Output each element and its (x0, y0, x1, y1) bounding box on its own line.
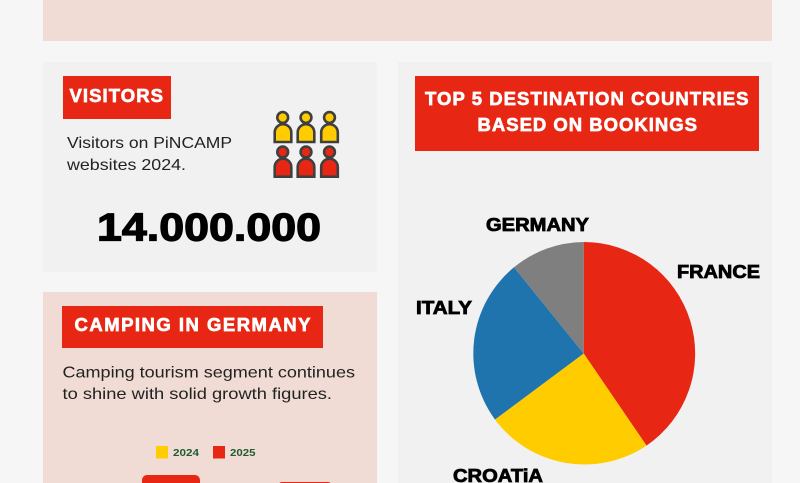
bar chart: tops of bars (142, 475, 332, 483)
panel: top 5 destination countries (398, 62, 772, 483)
heading: camping in Germany (62, 306, 323, 348)
heading: top 5 destination countries (415, 76, 759, 151)
icon: group of six people (275, 112, 338, 177)
text: camping description: Camping tourism segment continues (62, 364, 355, 382)
heading: top 5 destination countries: BASED ON BOOKINGS (478, 114, 697, 135)
heading: visitors (63, 76, 171, 119)
chart legend (156, 446, 256, 459)
pie chart (473, 242, 695, 464)
heading: top 5 destination countries: TOP 5 DESTINATION COUNTRIES (425, 88, 748, 109)
panel: camping in Germany (43, 292, 377, 483)
pie label: Italy: ITALY (416, 297, 473, 318)
top banner panel (43, 0, 772, 41)
big number: visitors count: 14.000.000 (97, 206, 321, 250)
text: visitors description (66, 135, 232, 174)
heading: visitors: VISITORS (70, 85, 163, 106)
heading: camping in Germany: CAMPING IN GERMANY (74, 314, 311, 335)
text: visitors description: Visitors on PiNCAMP (67, 135, 232, 152)
text: camping description: to shine with solid growth figures. (62, 386, 332, 403)
panel: visitors (43, 62, 377, 272)
pie label: France: FRANCE (677, 261, 760, 282)
pie label: Germany: GERMANY (486, 214, 590, 235)
chart legend: 2024 (173, 447, 199, 459)
text: visitors description: websites 2024. (66, 157, 186, 174)
chart legend: 2025 (230, 447, 256, 459)
text: camping description (62, 364, 355, 403)
